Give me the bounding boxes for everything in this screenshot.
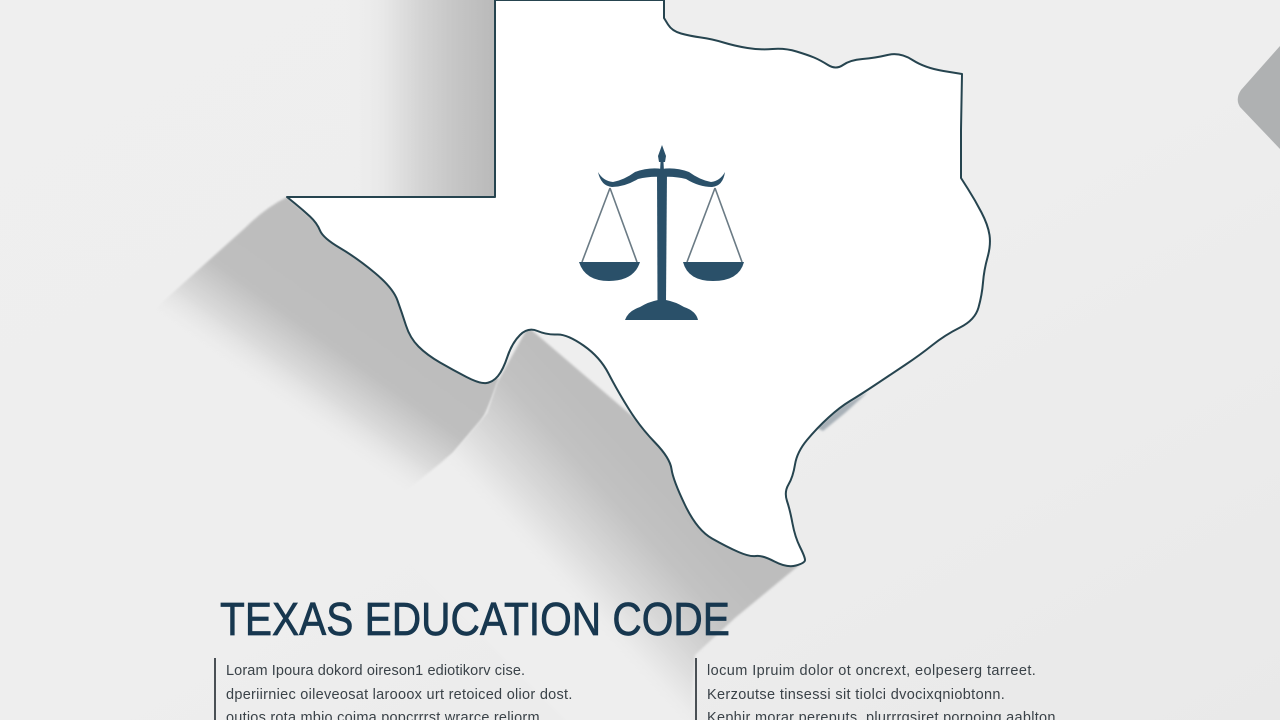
- shadow: gulf coast: [817, 392, 868, 431]
- icon: scale beam: [598, 168, 725, 187]
- shadow: south Texas: [370, 327, 803, 720]
- text block: left column: dperiirniec oileveosat larooox urt retoiced olior dost.: [226, 686, 573, 702]
- icon: right pan: [683, 188, 744, 281]
- shadow: west Texas: [120, 197, 500, 560]
- icon: scale finial: [658, 145, 666, 172]
- text block: left column: [214, 658, 614, 720]
- icon: scale column: [657, 170, 667, 302]
- icon: scales of justice: [579, 145, 744, 320]
- title: TEXAS EDUCATION CODE: [220, 593, 730, 645]
- text block: right column: Kerzoutse tinsessi sit tiolci dvocixqniobtonn.: [707, 686, 1005, 702]
- icon: left pan: [579, 188, 640, 281]
- text block: left column: Loram Ipoura dokord oireson1 ediotikorv cise.: [226, 663, 525, 679]
- text block: right column: [695, 658, 1095, 720]
- text block: right column: locum Ipruim dolor ot oncrext, eolpeserg tarreet.: [707, 663, 1036, 679]
- shadow: panhandle: [345, 0, 496, 197]
- decorative shape: right edge tab: [1238, 46, 1280, 149]
- icon: scale base: [625, 300, 698, 320]
- map: Texas outline: [287, 0, 990, 566]
